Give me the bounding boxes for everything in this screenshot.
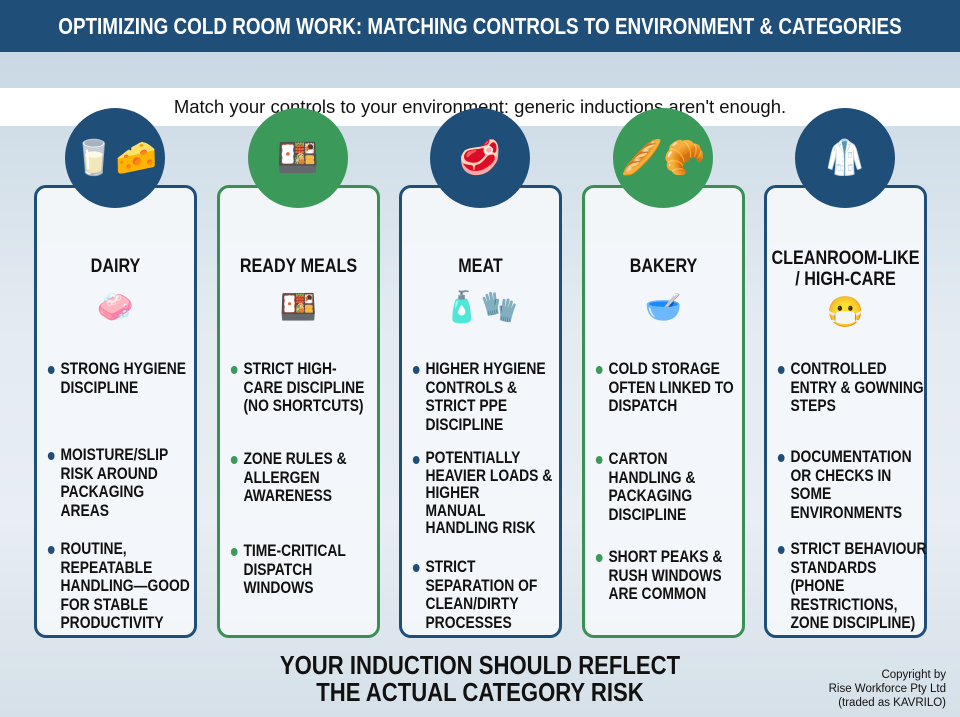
panel: meat [399,185,562,638]
icon: dairy circle: 🥛🧀 [73,139,157,177]
bullet 1: STEPS [790,397,836,415]
panel: dairy [34,185,197,638]
bullet 2 [777,448,925,522]
bullet 2: AWARENESS [243,487,332,505]
bullet 3 [412,558,560,632]
icon: bakery circle: 🥖🥐 [621,139,705,177]
bullet 2: RISK AROUND [60,464,158,482]
bullet 3: WINDOWS [243,579,314,597]
bullet 1 [595,360,743,416]
footer message: YOUR INDUCTION SHOULD REFLECT [280,650,680,680]
bullet 1: CONTROLS & [425,378,517,396]
bullet 3: (PHONE [790,577,844,595]
bullet 2 [230,450,378,506]
title: OPTIMIZING COLD ROOM WORK: MATCHING CONTROLS TO ENVIRONMENT & CATEGORIES [58,13,902,39]
bullet 2: HANDLING & [608,468,695,486]
bullet 1: ENTRY & GOWNING [790,378,924,396]
bullet 3: ARE COMMON [608,585,706,603]
subtitle [0,88,960,126]
icon: mixing bowl: 🥣 [645,291,682,324]
panel: bakery [582,185,745,638]
heading: cleanroom: / HIGH-CARE [795,269,896,290]
bullet 2: SOME [790,485,831,503]
bullet 2 [412,450,560,538]
copyright: Rise Workforce Pty Ltd [829,683,946,695]
bullet 2: ALLERGEN [243,468,320,486]
bullet 2: HEAVIER LOADS & [425,466,552,484]
bullet 1 [230,360,378,416]
bullet 1: STRICT HIGH- [243,360,337,378]
icon: meal tray: 🍱 [280,291,317,324]
heading: cleanroom [771,248,920,290]
bullet 2: CARTON [608,450,667,468]
subtitle: Match your controls to your environment: generic inductions aren't enough. [174,96,786,117]
bullet 2: PACKAGING [608,487,692,505]
bullet 3 [230,542,378,598]
bullet 2: HANDLING RISK [425,519,536,537]
bullet 1: CARE DISCIPLINE [243,378,364,396]
bullet 3: ROUTINE, [60,540,127,558]
icon: meat circle [430,108,530,208]
bullet 3: FOR STABLE [60,596,148,614]
bullet 2 [595,450,743,524]
bullet 2: PACKAGING [60,483,144,501]
bullet 1: STRICT PPE [425,397,507,415]
bullet 2: POTENTIALLY [425,449,520,467]
bullet 1: DISCIPLINE [425,416,503,434]
icon: meat circle: 🥩 [459,139,501,177]
heading: bakery: BAKERY [630,256,697,277]
bullet 3: ZONE DISCIPLINE) [790,614,915,632]
bullet 1: (NO SHORTCUTS) [243,397,364,415]
bullet 1: HIGHER HYGIENE [425,360,546,378]
title [0,0,960,52]
bullet 2: ENVIRONMENTS [790,504,902,522]
heading: ready meals: READY MEALS [240,256,357,277]
bullet 1: DISPATCH [608,397,677,415]
bullet 3: REPEATABLE [60,558,152,576]
bullet 2: MOISTURE/SLIP [60,446,168,464]
bullet 3: RESTRICTIONS, [790,596,897,614]
copyright: (traded as KAVRILO) [838,697,946,709]
bullet 2: HIGHER [425,484,479,502]
bullet 1 [412,360,560,434]
bullet 1: CONTROLLED [790,360,887,378]
bullet 3: TIME-CRITICAL [243,542,346,560]
icon: ready meals circle [248,108,348,208]
icon: cleanroom circle [795,108,895,208]
bullet 3: STANDARDS [790,558,876,576]
icon: PPE gloves: 🧴🧤 [443,291,518,324]
heading: meat: MEAT [458,256,503,277]
bullet 2 [47,446,195,520]
heading: cleanroom: CLEANROOM-LIKE [771,248,920,269]
bullet 1: OFTEN LINKED TO [608,378,734,396]
footer message [280,650,680,707]
panel: ready meals [217,185,380,638]
heading: dairy: DAIRY [91,256,140,277]
icon: ready meals circle: 🍱 [277,139,319,177]
bullet 3: CLEAN/DIRTY [425,595,519,613]
bullet 2: ZONE RULES & [243,450,347,468]
icon: dairy circle [65,108,165,208]
bullet 1: COLD STORAGE [608,360,720,378]
bullet 1: STRONG HYGIENE [60,360,186,378]
bullet 1 [47,360,195,397]
bullet 3: RUSH WINDOWS [608,566,722,584]
bullet 3 [595,548,743,604]
bullet 3: DISPATCH [243,560,312,578]
bullet 3 [777,540,925,632]
bullet 3 [47,540,195,632]
footer message: THE ACTUAL CATEGORY RISK [316,677,644,707]
bullet 3: PRODUCTIVITY [60,614,164,632]
bullet 1 [777,360,925,416]
bullet 3: STRICT [425,558,475,576]
icon: cleanroom circle: 🥼 [824,139,866,177]
bullet 2: DOCUMENTATION [790,448,912,466]
bullet 3: SEPARATION OF [425,576,537,594]
bullet 2: AREAS [60,502,109,520]
bullet 3: PROCESSES [425,614,512,632]
copyright [829,669,946,709]
icon: bakery circle [613,108,713,208]
copyright: Copyright by [881,669,946,681]
icon: handwashing: 🧼 [97,291,134,324]
panel: cleanroom [764,185,927,638]
bullet 3: HANDLING—GOOD [60,577,190,595]
bullet 2: OR CHECKS IN [790,466,891,484]
bullet 3: SHORT PEAKS & [608,548,722,566]
bullet 2: MANUAL [425,502,486,520]
bullet 1: DISCIPLINE [60,378,138,396]
bullet 3: STRICT BEHAVIOUR [790,540,926,558]
bullet 2: DISCIPLINE [608,506,686,524]
icon: gowning: 😷 [827,296,864,329]
